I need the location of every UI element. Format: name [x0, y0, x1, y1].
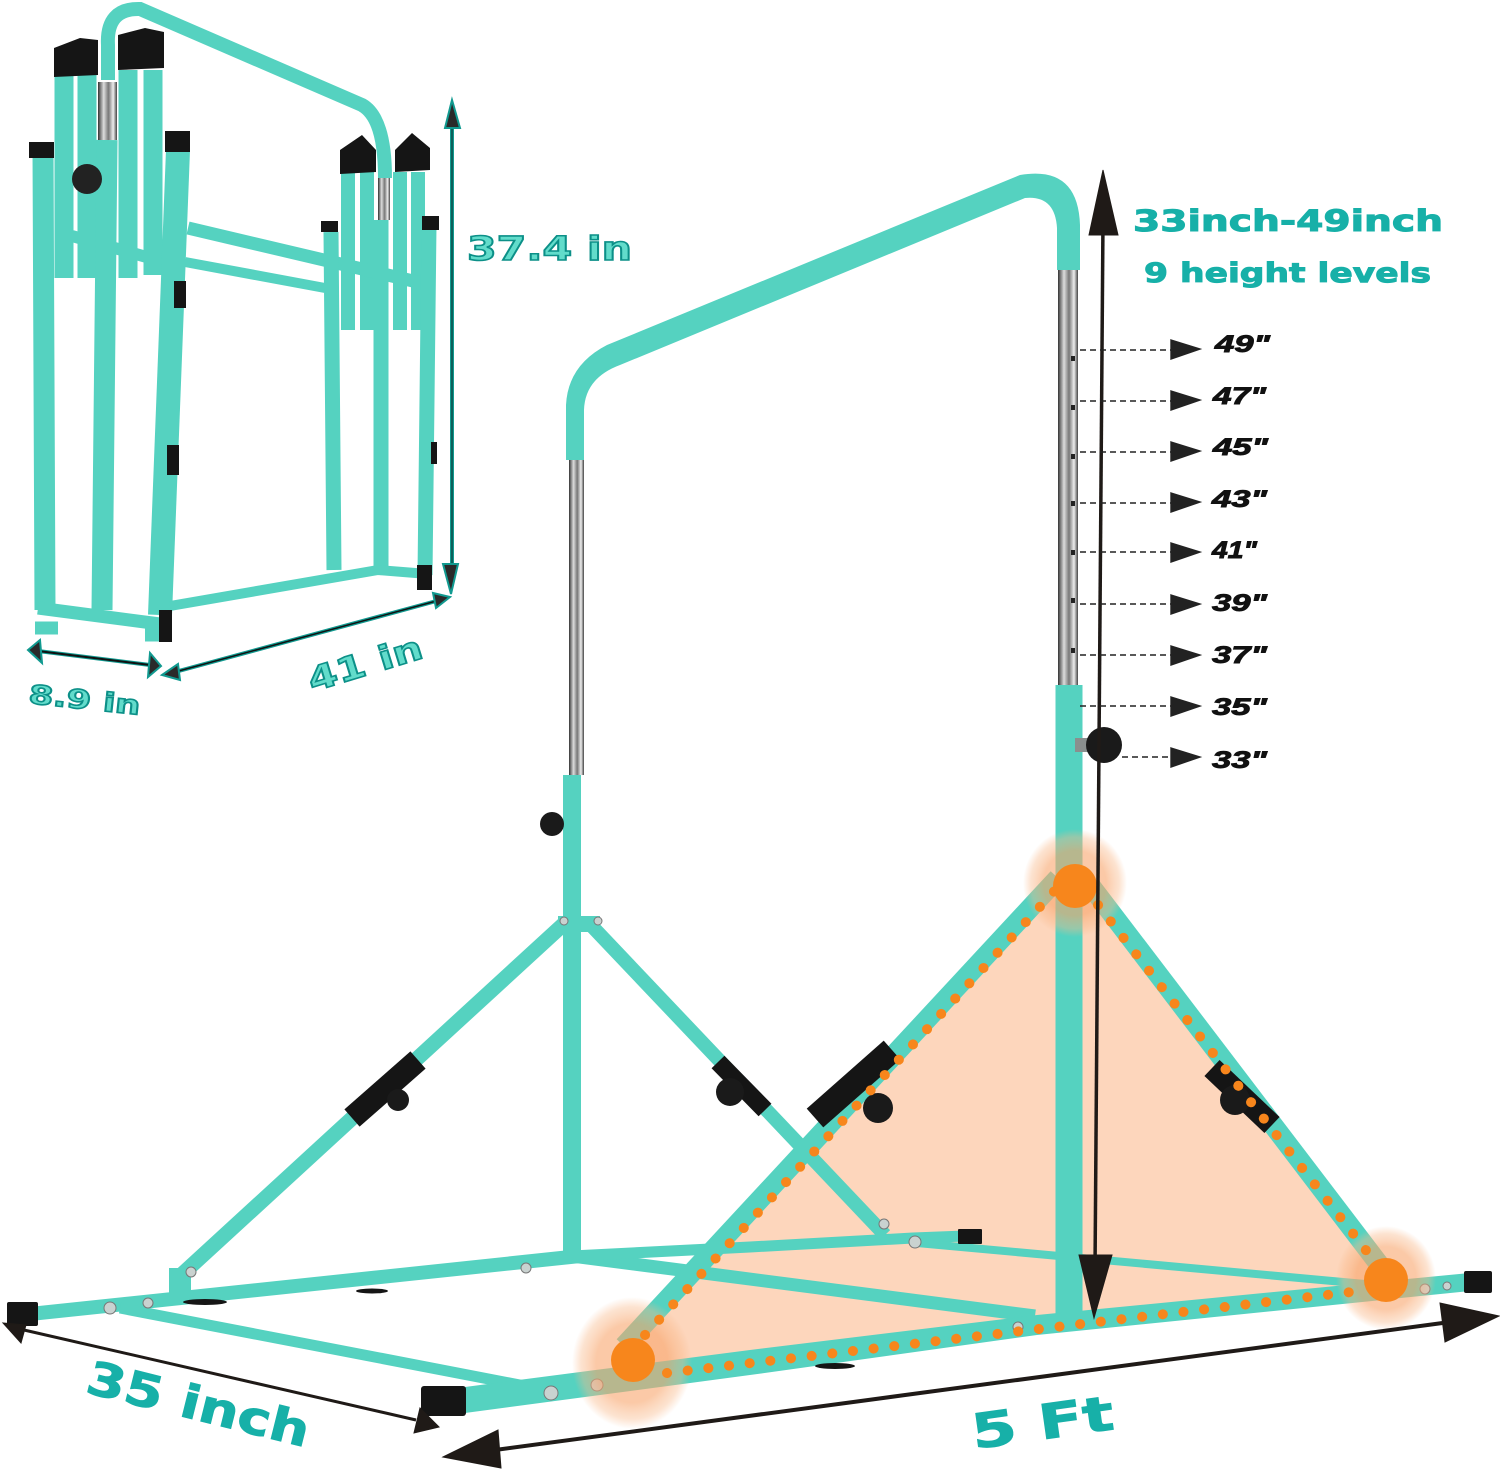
dimension text: 5 Ft [968, 1386, 1117, 1461]
folded base [38, 608, 160, 624]
dimension text: 41 in [303, 628, 427, 700]
folded hoop [108, 9, 385, 178]
folded rear stub bar [72, 236, 150, 258]
dimension text: 33inch-49inch [1133, 204, 1443, 238]
adjustment knobs [387, 727, 1250, 1123]
folded bar [29, 9, 439, 642]
foot caps [7, 1229, 1492, 1416]
height labels: 49" [1214, 331, 1271, 358]
front upright and braces [624, 685, 1385, 1346]
folded feet [35, 628, 160, 635]
chrome poles [569, 270, 1078, 775]
folded inner tubes [64, 70, 153, 278]
top bar [566, 174, 1080, 460]
dimension text: 8.9 in [27, 680, 142, 722]
front hinges [815, 1050, 1272, 1125]
orange dotted outline [645, 885, 1372, 1373]
dimension text: 9 height levels [1144, 258, 1431, 289]
width arrows [3, 1303, 1499, 1468]
bolts [104, 917, 1451, 1400]
folded height arrow [443, 100, 460, 594]
base frame [30, 1236, 1480, 1413]
rear brace hinges [352, 1060, 765, 1118]
height labels [1211, 331, 1271, 774]
height arrow [1079, 170, 1118, 1318]
height labels: 33" [1212, 747, 1268, 774]
folded chrome poles [98, 82, 390, 220]
folded uprights [43, 140, 107, 610]
shaded stability triangle [624, 878, 1392, 1370]
height labels: 41" [1211, 537, 1258, 564]
rear upright and braces [178, 775, 885, 1294]
folded right inner tubes [348, 172, 418, 330]
folded pads and caps [29, 28, 439, 642]
height labels: 39" [1212, 590, 1268, 617]
height labels: 43" [1211, 486, 1268, 513]
orange pivot markers [572, 829, 1436, 1429]
folded width arrows [28, 593, 450, 680]
height level markers [1071, 340, 1200, 767]
dimension text: 35 inch [81, 1350, 316, 1458]
folded knob [72, 164, 102, 194]
height labels: 45" [1212, 434, 1269, 461]
folded cross bars [188, 228, 430, 285]
height labels: 35" [1212, 694, 1268, 721]
height labels: 37" [1212, 642, 1268, 669]
dimension text: 37.4 in [467, 229, 632, 268]
height labels: 47" [1212, 383, 1267, 410]
